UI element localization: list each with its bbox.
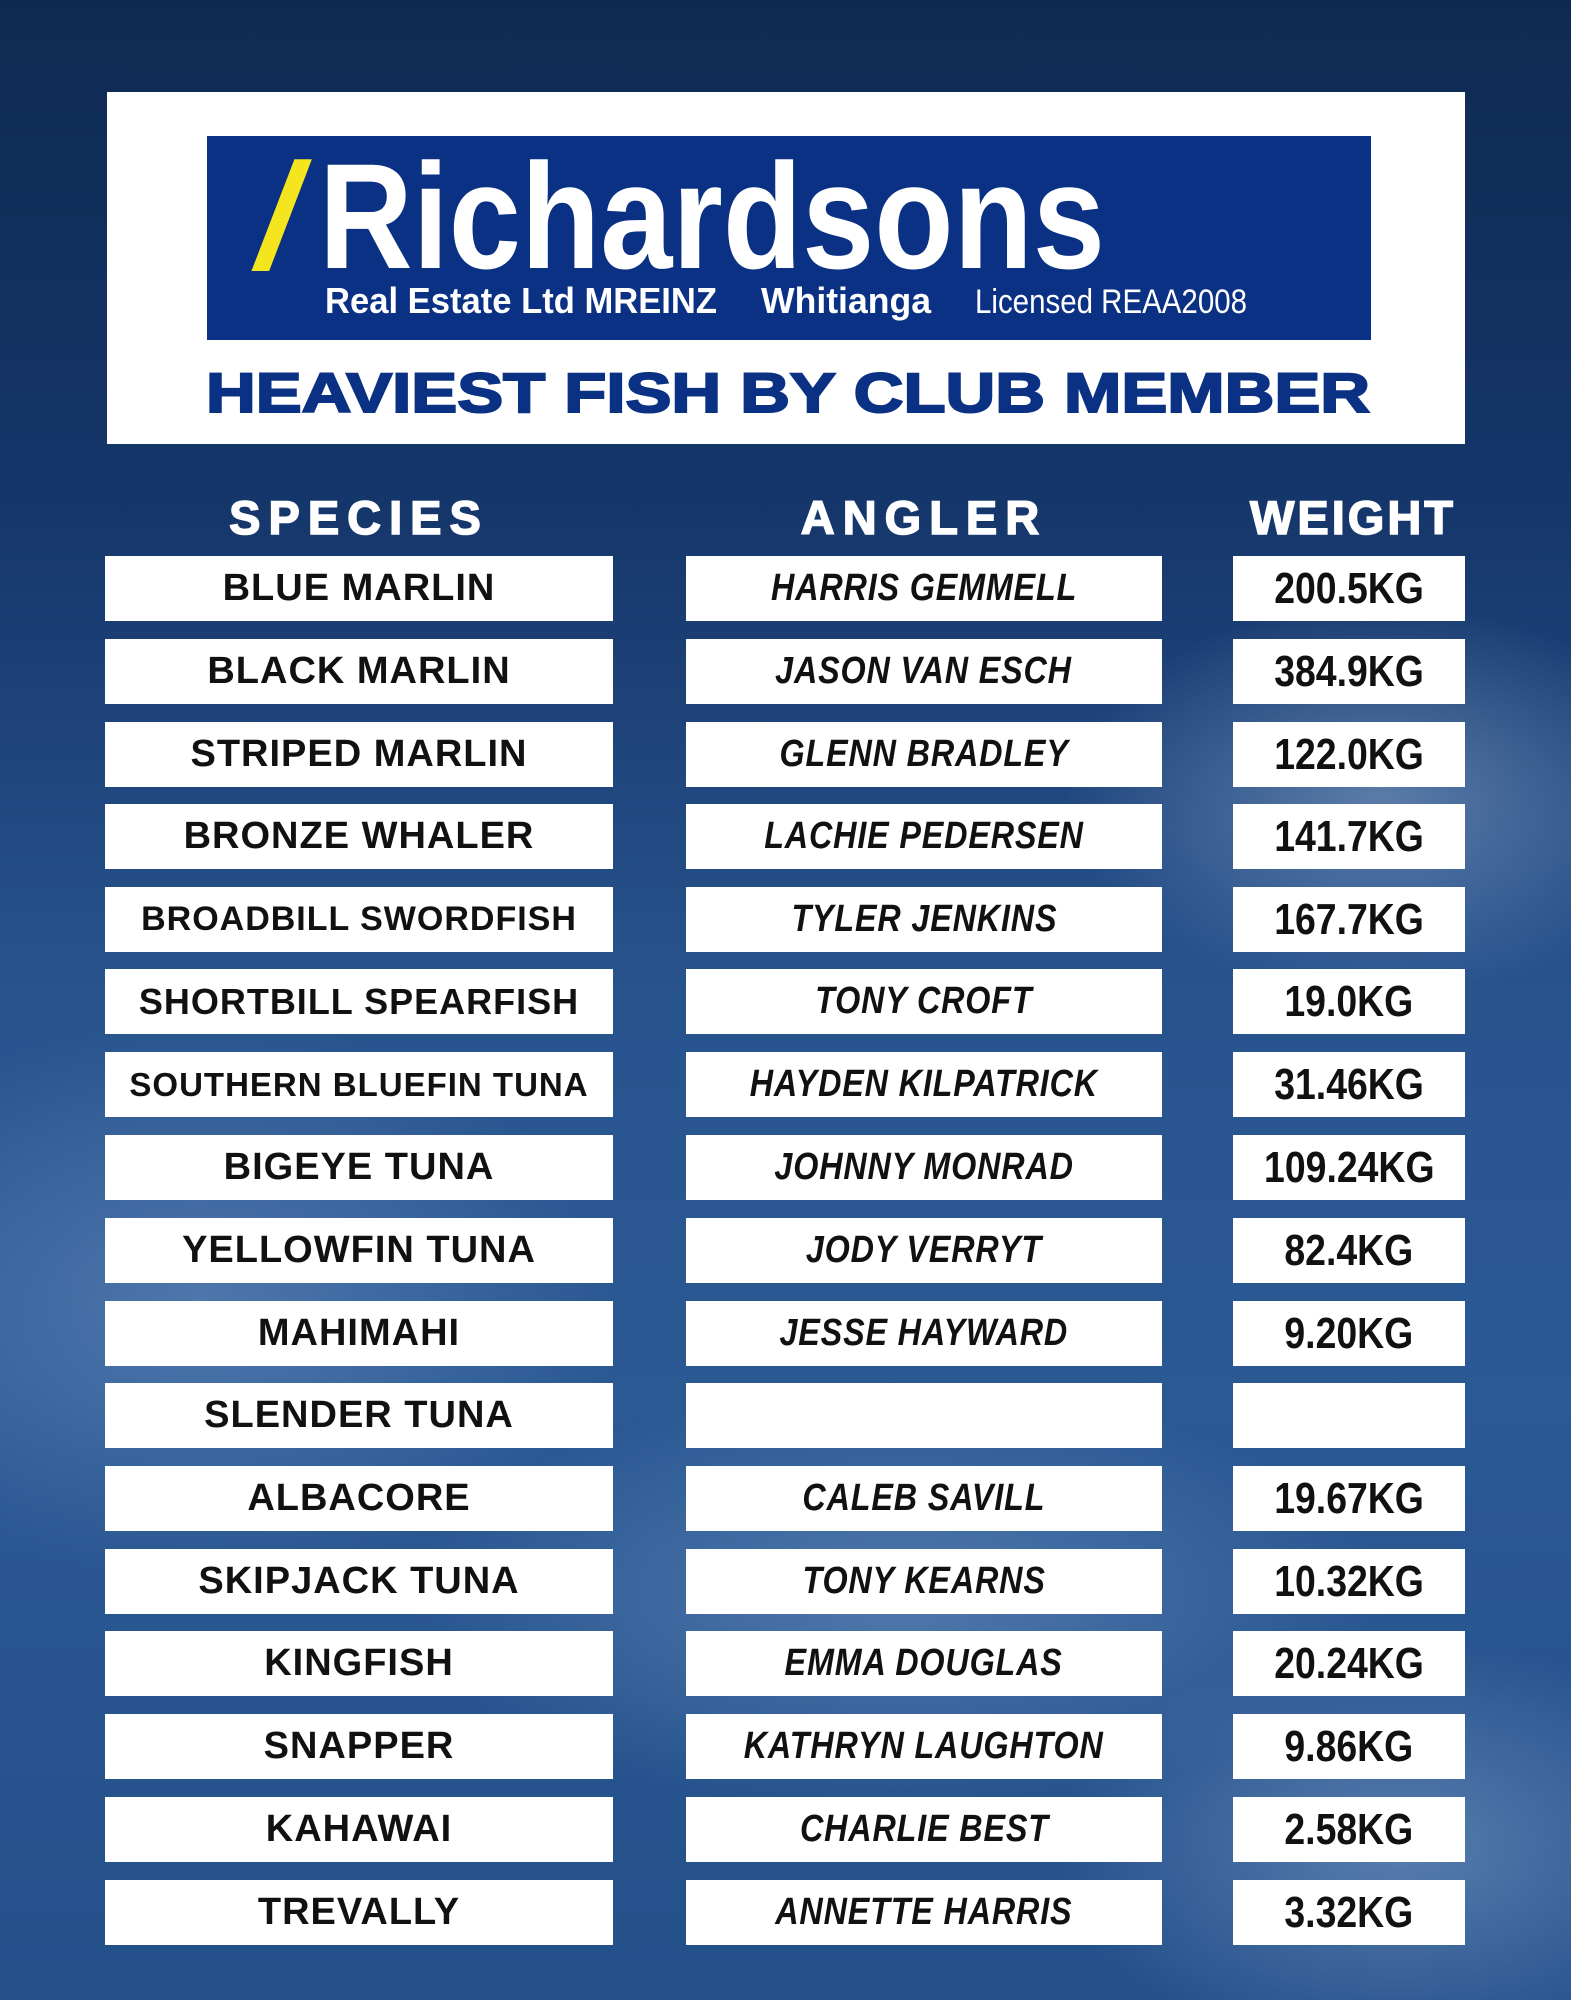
- logo: Richardsons: [319, 136, 1105, 300]
- text: 109.24KG: [1264, 1142, 1434, 1192]
- text: 9.20KG: [1285, 1308, 1413, 1358]
- logo: Whitianga: [761, 280, 932, 321]
- text: 10.32KG: [1274, 1556, 1424, 1606]
- header panel: [107, 92, 1465, 444]
- text: 20.24KG: [1274, 1638, 1424, 1688]
- row 8: BIGEYE TUNA: [224, 1146, 494, 1188]
- text: 82.4KG: [1285, 1226, 1413, 1274]
- text: ANNETTE HARRIS: [775, 1891, 1073, 1933]
- row 8: [105, 1135, 613, 1200]
- text: 19.67KG: [1274, 1474, 1424, 1522]
- column header: weight: WEIGHT: [1250, 491, 1456, 544]
- row 17: TREVALLY: [258, 1891, 460, 1933]
- row 15: [105, 1714, 613, 1779]
- row 1: [105, 556, 613, 621]
- row 3: STRIPED MARLIN: [190, 733, 528, 775]
- row 4: [105, 804, 613, 869]
- row 6: [105, 969, 613, 1034]
- text: 3.32KG: [1285, 1888, 1413, 1936]
- row 7: SOUTHERN BLUEFIN TUNA: [129, 1066, 589, 1102]
- row 14: [105, 1631, 613, 1696]
- row 10: MAHIMAHI: [258, 1312, 460, 1354]
- logo: Licensed REAA2008: [975, 283, 1247, 321]
- text: CHARLIE BEST: [800, 1808, 1048, 1850]
- text: 122.0KG: [1274, 730, 1424, 778]
- text: JASON VAN ESCH: [776, 650, 1072, 692]
- row 16: [105, 1797, 613, 1862]
- row 17: [105, 1880, 613, 1945]
- text: 167.7KG: [1274, 894, 1424, 944]
- text: KATHRYN LAUGHTON: [744, 1725, 1104, 1767]
- text: EMMA DOUGLAS: [785, 1642, 1063, 1684]
- text: LACHIE PEDERSEN: [764, 815, 1084, 857]
- logo: /: [251, 136, 312, 300]
- text: JODY VERRYT: [806, 1229, 1042, 1271]
- text: HARRIS GEMMELL: [771, 567, 1077, 609]
- row 10: [105, 1301, 613, 1366]
- text: 200.5KG: [1274, 564, 1424, 612]
- row 15: SNAPPER: [264, 1725, 454, 1767]
- row 9: [105, 1218, 613, 1283]
- row 6: SHORTBILL SPEARFISH: [139, 980, 579, 1022]
- logo: Real Estate Ltd MREINZ: [325, 280, 717, 321]
- logo: [207, 136, 1371, 340]
- row 1: BLUE MARLIN: [223, 567, 495, 609]
- row 4: BRONZE WHALER: [184, 815, 534, 857]
- row 13: SKIPJACK TUNA: [198, 1560, 520, 1602]
- row 3: [105, 722, 613, 787]
- row 5: [105, 887, 613, 952]
- row 12: [105, 1466, 613, 1531]
- text: CALEB SAVILL: [803, 1477, 1045, 1519]
- text: TONY CROFT: [815, 980, 1033, 1022]
- text: 384.9KG: [1274, 646, 1424, 696]
- text: JOHNNY MONRAD: [774, 1146, 1074, 1188]
- text: HAYDEN KILPATRICK: [750, 1063, 1098, 1105]
- text: 19.0KG: [1285, 976, 1413, 1026]
- row 11: [105, 1383, 613, 1448]
- text: TONY KEARNS: [802, 1560, 1046, 1602]
- row 14: KINGFISH: [264, 1642, 454, 1684]
- text: 2.58KG: [1285, 1804, 1413, 1854]
- column header: species: SPECIES: [229, 491, 489, 544]
- row 11: SLENDER TUNA: [204, 1394, 514, 1436]
- text: GLENN BRADLEY: [779, 733, 1069, 775]
- text: TYLER JENKINS: [791, 898, 1057, 940]
- row 9: YELLOWFIN TUNA: [182, 1229, 536, 1271]
- row 2: BLACK MARLIN: [207, 650, 511, 692]
- row 2: [105, 639, 613, 704]
- row 7: [105, 1052, 613, 1117]
- row 16: KAHAWAI: [266, 1808, 452, 1850]
- row 12: ALBACORE: [247, 1477, 471, 1519]
- column header: angler: ANGLER: [801, 491, 1047, 544]
- text: JESSE HAYWARD: [780, 1312, 1068, 1354]
- text: 9.86KG: [1285, 1722, 1413, 1770]
- row 13: [105, 1549, 613, 1614]
- row 5: BROADBILL SWORDFISH: [141, 900, 577, 938]
- text: 141.7KG: [1274, 812, 1424, 860]
- text: 31.46KG: [1274, 1060, 1424, 1108]
